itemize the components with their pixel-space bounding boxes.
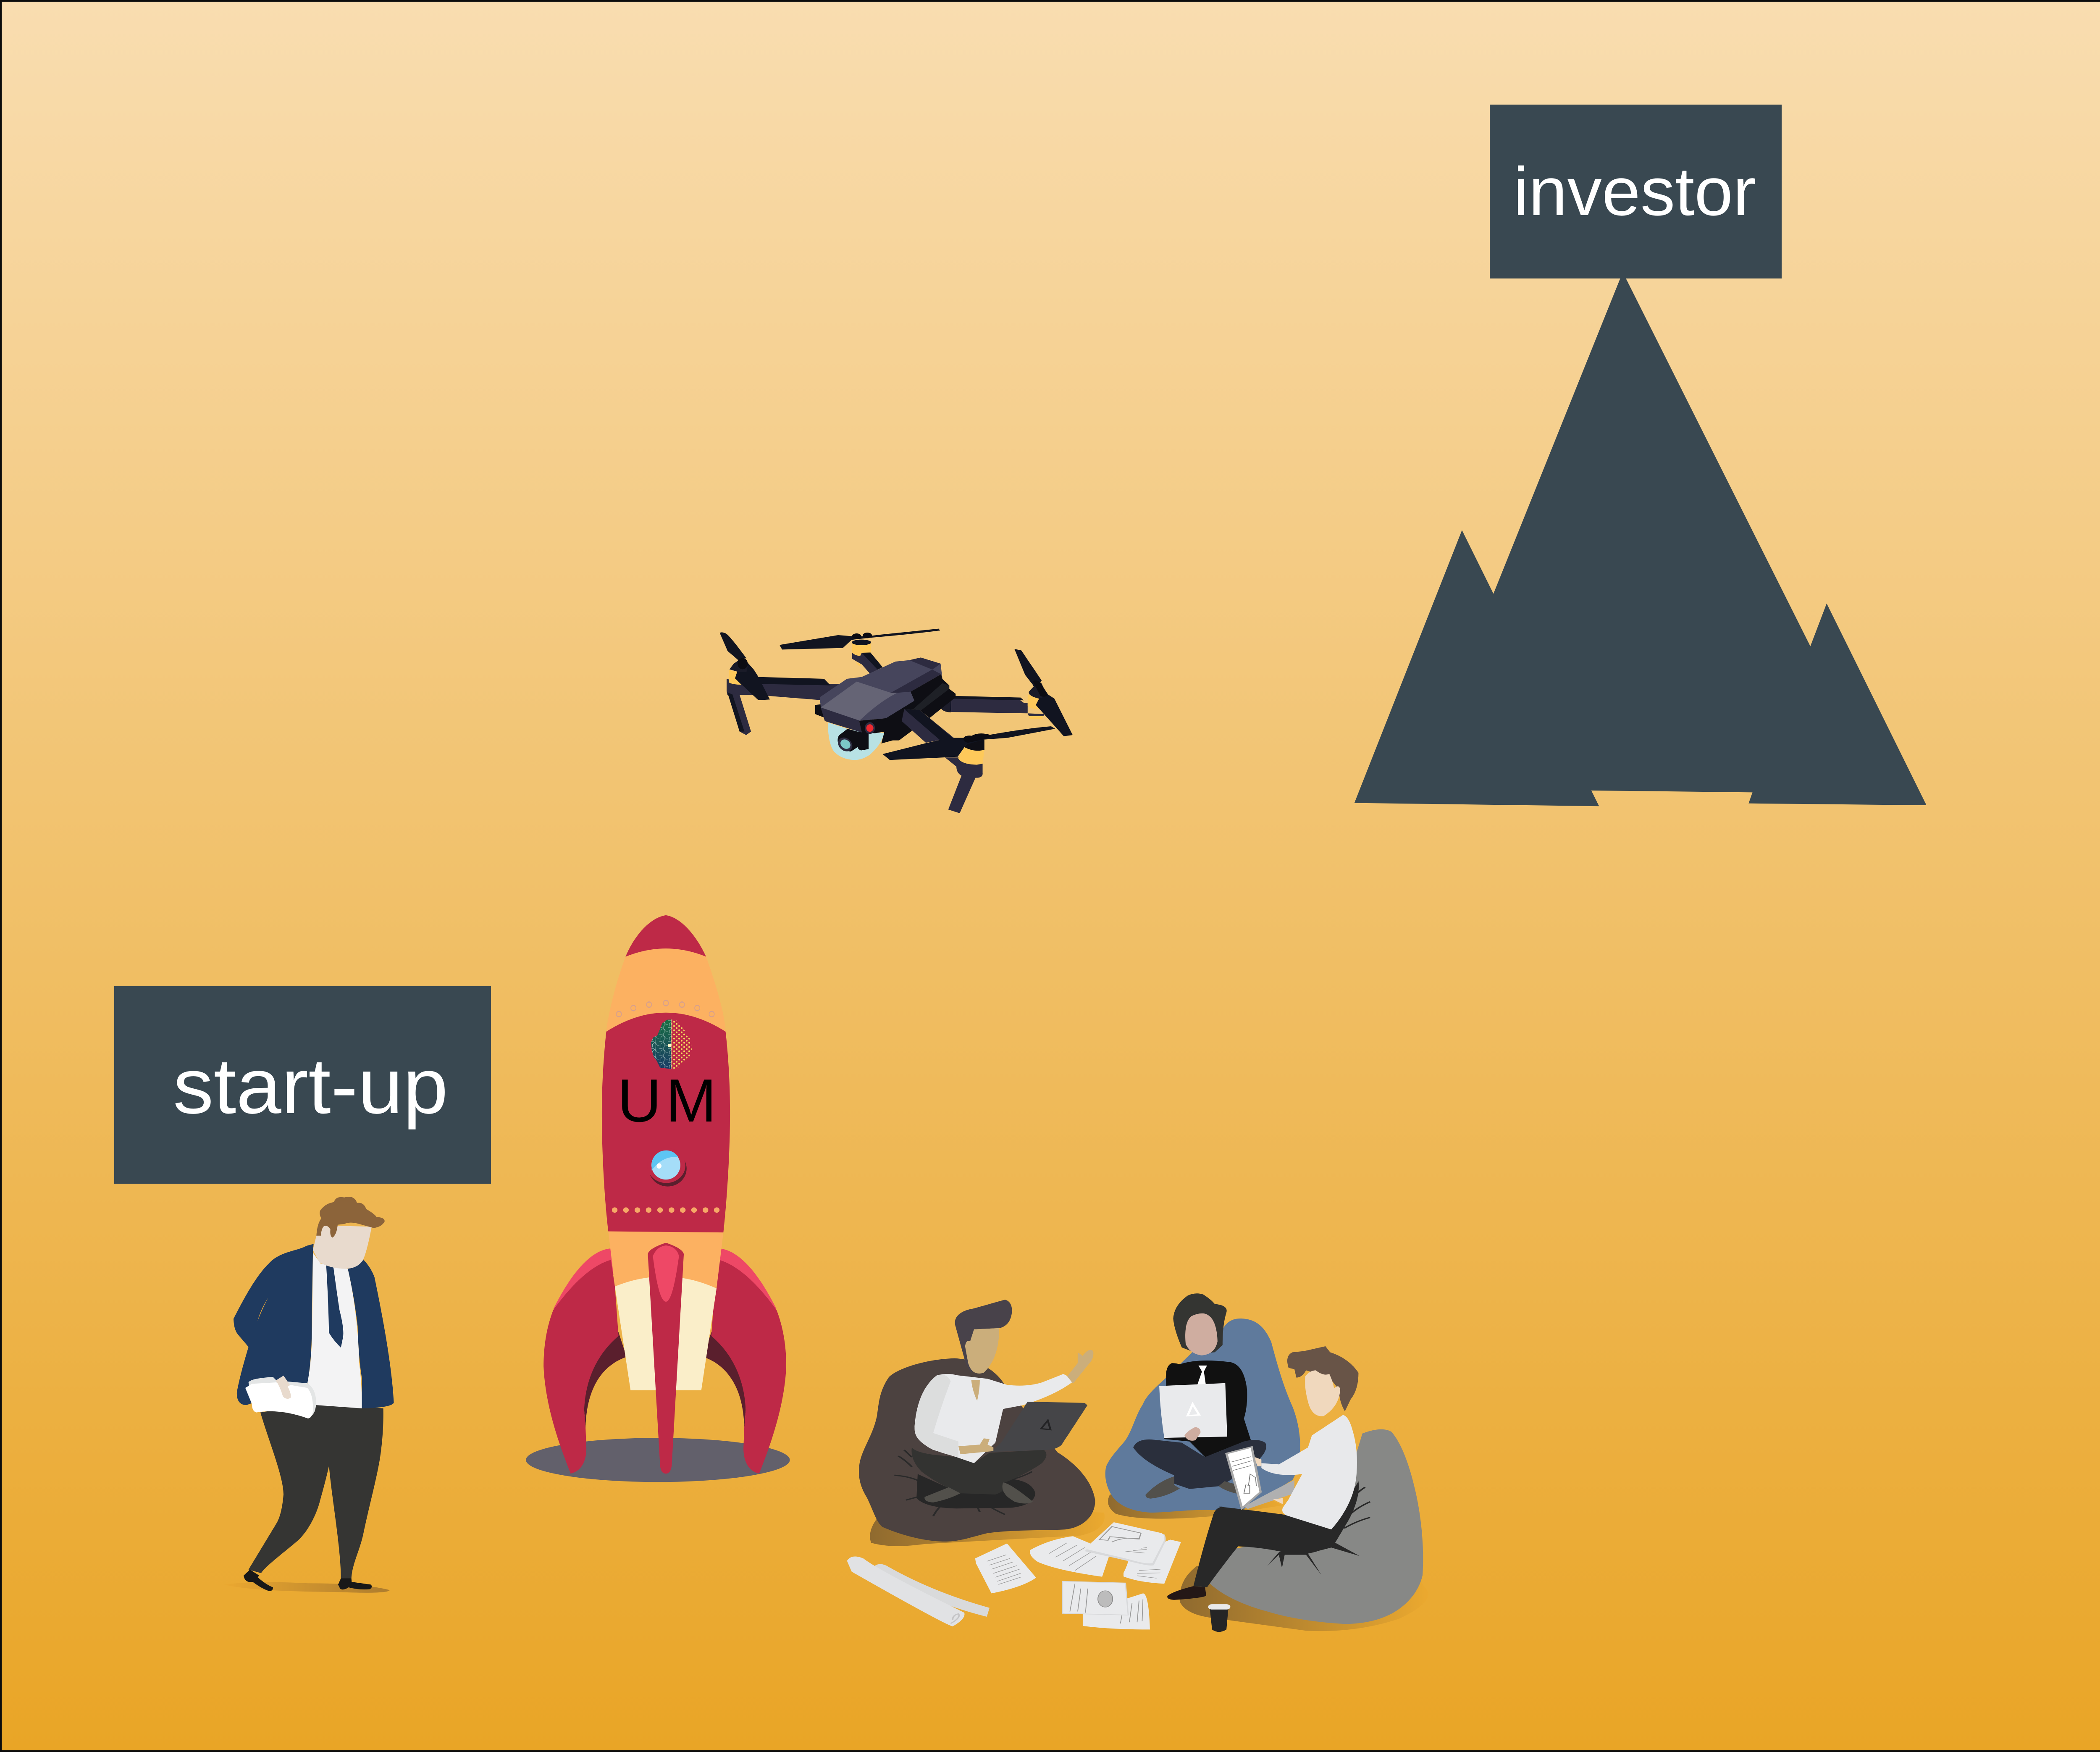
shoes xyxy=(244,1570,372,1591)
middle person on blue beanbag xyxy=(1105,1293,1300,1519)
investor label xyxy=(1490,105,1782,278)
rocket left fin xyxy=(543,1248,627,1474)
porthole xyxy=(647,1148,687,1187)
dot band xyxy=(612,1207,719,1213)
start-up label xyxy=(114,986,491,1184)
icon: brain logo xyxy=(651,1019,692,1069)
centre fin xyxy=(648,1243,684,1474)
head xyxy=(313,1197,385,1269)
team on beanbags xyxy=(847,1293,1428,1632)
rivets xyxy=(616,1001,714,1017)
rocket xyxy=(526,915,790,1482)
scattered documents xyxy=(975,1522,1181,1629)
man with papers xyxy=(224,1197,394,1593)
investor label: investor xyxy=(1513,153,1756,230)
left person on brown beanbag xyxy=(859,1300,1105,1546)
rocket body xyxy=(602,915,730,1390)
right person on grey beanbag xyxy=(1167,1346,1428,1631)
jacket and shirt xyxy=(234,1244,394,1408)
rolled blueprints xyxy=(847,1557,990,1626)
coffee cup xyxy=(1208,1604,1230,1632)
UM text: UM xyxy=(617,1066,717,1135)
mountain xyxy=(1354,272,1927,806)
rolled papers and hand xyxy=(245,1376,316,1418)
man ground shadow xyxy=(224,1582,390,1593)
start-up label: start-up xyxy=(173,1042,448,1130)
rocket ground shadow xyxy=(526,1438,790,1482)
rocket right fin xyxy=(703,1248,786,1474)
drone xyxy=(720,629,1073,813)
trousers xyxy=(249,1403,383,1579)
